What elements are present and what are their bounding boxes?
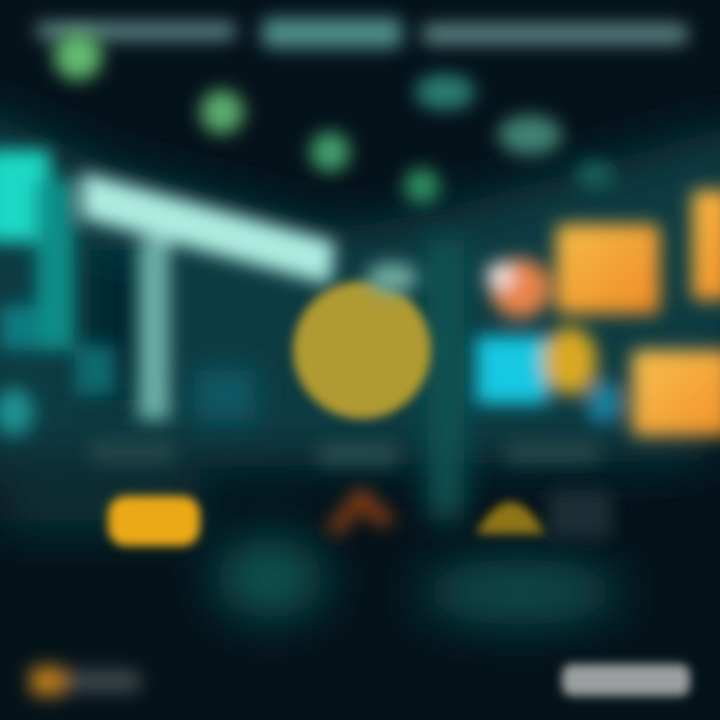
badge: dark red and gold mark [325, 486, 398, 534]
panel: right colour cluster [476, 190, 720, 436]
title [36, 18, 688, 48]
background glow: teal mid band [0, 100, 720, 624]
footer logo left [30, 666, 140, 696]
label placeholders: three captions [90, 442, 600, 464]
icons: row of green dots [54, 32, 615, 204]
dark card behind right badge [548, 490, 612, 538]
highlight above gold circle [366, 262, 418, 294]
badge: yellow pill [108, 496, 200, 546]
footer button right [562, 664, 690, 696]
panel: left teal structure [0, 150, 335, 436]
chart: central gold circle [293, 281, 431, 419]
central column [195, 240, 464, 520]
badge: gold hump [476, 502, 546, 534]
